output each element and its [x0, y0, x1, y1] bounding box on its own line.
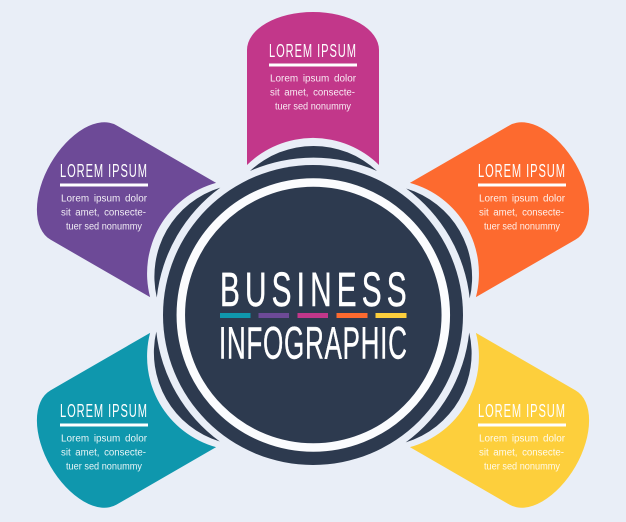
heading: LOREM IPSUM [269, 41, 356, 62]
heading: LOREM IPSUM [60, 401, 147, 422]
teal tab shape [18, 333, 216, 522]
body text: Lorem ipsum dolor [479, 434, 566, 444]
title: infographic: INFOGRAPHIC [219, 318, 407, 368]
title: business: BUSINESS [220, 264, 407, 317]
body text [270, 74, 357, 112]
purple tab shape [18, 106, 216, 297]
magenta tab shape [247, 12, 379, 165]
panel: lower right yellow [410, 333, 608, 522]
yellow tab shape [410, 333, 608, 522]
body text: sit amet, consecte- [479, 208, 564, 218]
body text: Lorem ipsum dolor [61, 194, 148, 204]
panel: lower left teal [18, 333, 216, 522]
body text: tuer sed nonummy [66, 222, 142, 232]
body text: sit amet, consecte- [479, 448, 564, 458]
central dark disc [163, 165, 463, 465]
heading: LOREM IPSUM [60, 161, 147, 182]
heading: LOREM IPSUM [478, 401, 565, 422]
body text [479, 194, 566, 232]
heading rule [478, 184, 566, 186]
heading rule [269, 64, 357, 66]
white ring [181, 182, 446, 448]
body text: tuer sed nonummy [66, 462, 142, 472]
body text: tuer sed nonummy [484, 222, 560, 232]
body text [479, 434, 566, 472]
body text: Lorem ipsum dolor [270, 74, 357, 84]
orange tab shape [410, 106, 608, 297]
panel: top magenta [247, 12, 379, 165]
body text: Lorem ipsum dolor [61, 434, 148, 444]
body text: Lorem ipsum dolor [479, 194, 566, 204]
body text [61, 194, 148, 232]
panel: upper right orange [410, 106, 608, 297]
heading: LOREM IPSUM [478, 161, 565, 182]
heading rule [60, 184, 148, 186]
body text: sit amet, consecte- [61, 208, 146, 218]
body text: sit amet, consecte- [270, 88, 355, 98]
body text: tuer sed nonummy [484, 462, 560, 472]
body text: sit amet, consecte- [61, 448, 146, 458]
body text: tuer sed nonummy [275, 102, 351, 112]
heading rule [60, 424, 148, 426]
body text [61, 434, 148, 472]
heading rule [478, 424, 566, 426]
coloured divider bars [220, 313, 406, 318]
panel: upper left purple [18, 106, 216, 297]
dark crescents behind the central disc [135, 146, 491, 455]
